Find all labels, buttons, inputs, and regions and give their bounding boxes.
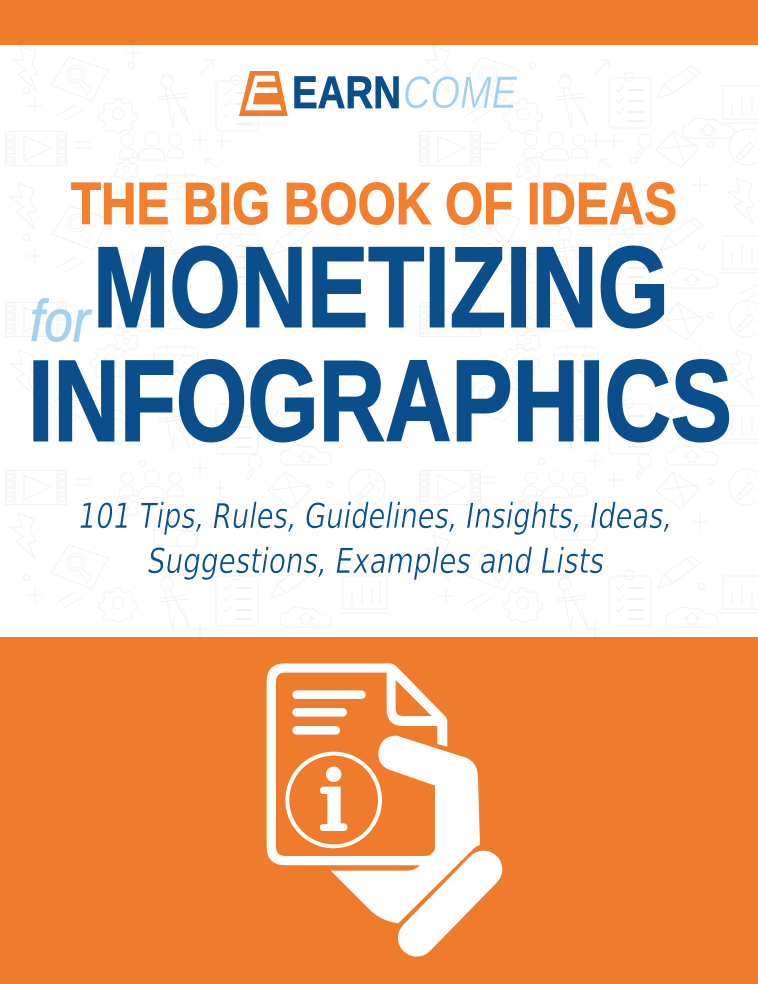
subtitle: [79, 497, 672, 582]
bottom orange panel: [0, 637, 758, 984]
sleeve: [417, 869, 484, 938]
hand: [331, 736, 480, 923]
logo: EarnCome: [239, 67, 518, 118]
logo icon: E trapezoid: [239, 71, 288, 116]
title word: for: for: [30, 289, 92, 354]
subtitle: Suggestions, Examples and Lists: [148, 542, 604, 582]
logo word: COME: COME: [403, 67, 518, 118]
logo word: EARN: EARN: [292, 67, 401, 118]
document fold: [396, 680, 432, 716]
top orange band: [0, 0, 758, 45]
info circle: [287, 754, 380, 846]
info letter i: [320, 767, 347, 831]
icon: hand holding info document: [267, 663, 484, 938]
document text lines: [297, 695, 361, 730]
background icon pattern: [6, 45, 758, 637]
document outline: [267, 663, 447, 865]
